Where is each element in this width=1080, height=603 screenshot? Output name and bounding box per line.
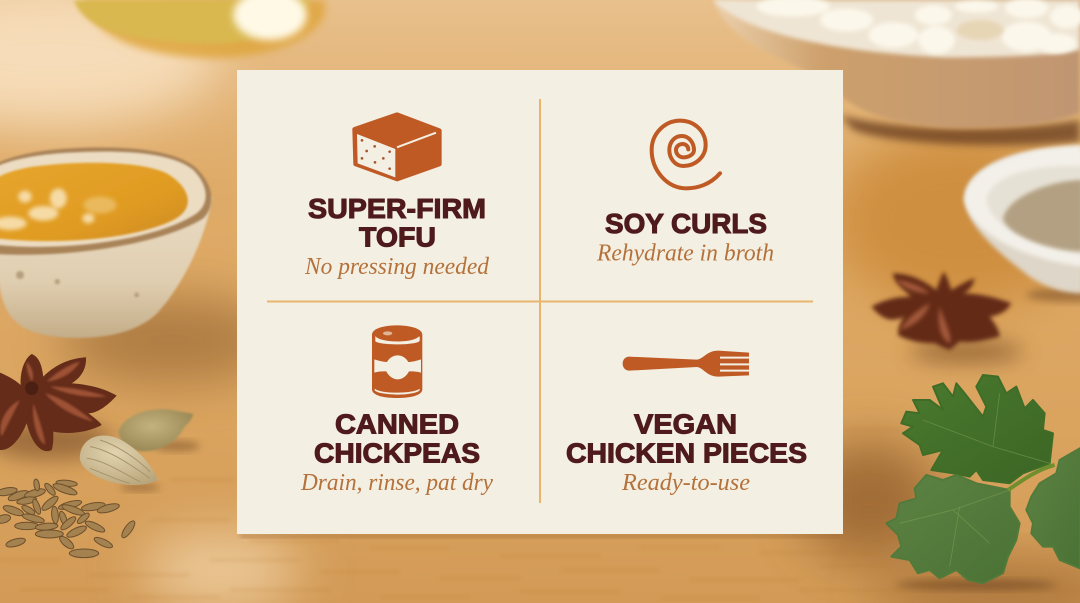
subtitle: drain, rinse, pat dry: Drain, rinse, pat dry bbox=[300, 470, 493, 496]
star anise, right, blurred bbox=[871, 272, 1023, 363]
icon: spiral curl bbox=[652, 121, 720, 188]
heading: vegan chicken pieces: VEGAN bbox=[634, 408, 737, 440]
seed bowl, blurred bbox=[965, 145, 1080, 302]
quadrant dividers bbox=[267, 99, 813, 503]
quadrant: vegan chicken pieces bbox=[566, 351, 807, 496]
star anise, left bbox=[0, 354, 117, 460]
icon: fork bbox=[623, 351, 749, 377]
icon: tofu block bbox=[355, 115, 439, 179]
quadrant: canned chickpeas bbox=[300, 325, 493, 496]
oil glass, blurred bbox=[74, 0, 325, 58]
rice bowl, blurred bbox=[713, 0, 1080, 145]
heading: canned chickpeas: CANNED bbox=[335, 408, 459, 440]
wood grain bbox=[0, 430, 1080, 598]
heading: soy curls: SOY CURLS bbox=[605, 208, 767, 239]
curry bowl bbox=[0, 147, 212, 338]
cardamom pods bbox=[80, 409, 200, 491]
subtitle: ready-to-use: Ready-to-use bbox=[621, 470, 750, 496]
quadrant: soy curls bbox=[596, 121, 774, 267]
cumin seeds bbox=[0, 479, 137, 558]
subtitle: rehydrate in broth: Rehydrate in broth bbox=[596, 240, 774, 266]
cilantro sprig bbox=[886, 375, 1080, 590]
quadrant: super-firm tofu bbox=[304, 115, 490, 280]
heading: super-firm tofu: TOFU bbox=[359, 222, 436, 252]
icon: can bbox=[372, 325, 422, 398]
heading: canned chickpeas: CHICKPEAS bbox=[314, 438, 480, 468]
heading: vegan chicken pieces: CHICKEN PIECES bbox=[566, 438, 807, 468]
heading: super-firm tofu: SUPER-FIRM bbox=[308, 193, 486, 224]
subtitle: no pressing needed: No pressing needed bbox=[304, 254, 490, 280]
